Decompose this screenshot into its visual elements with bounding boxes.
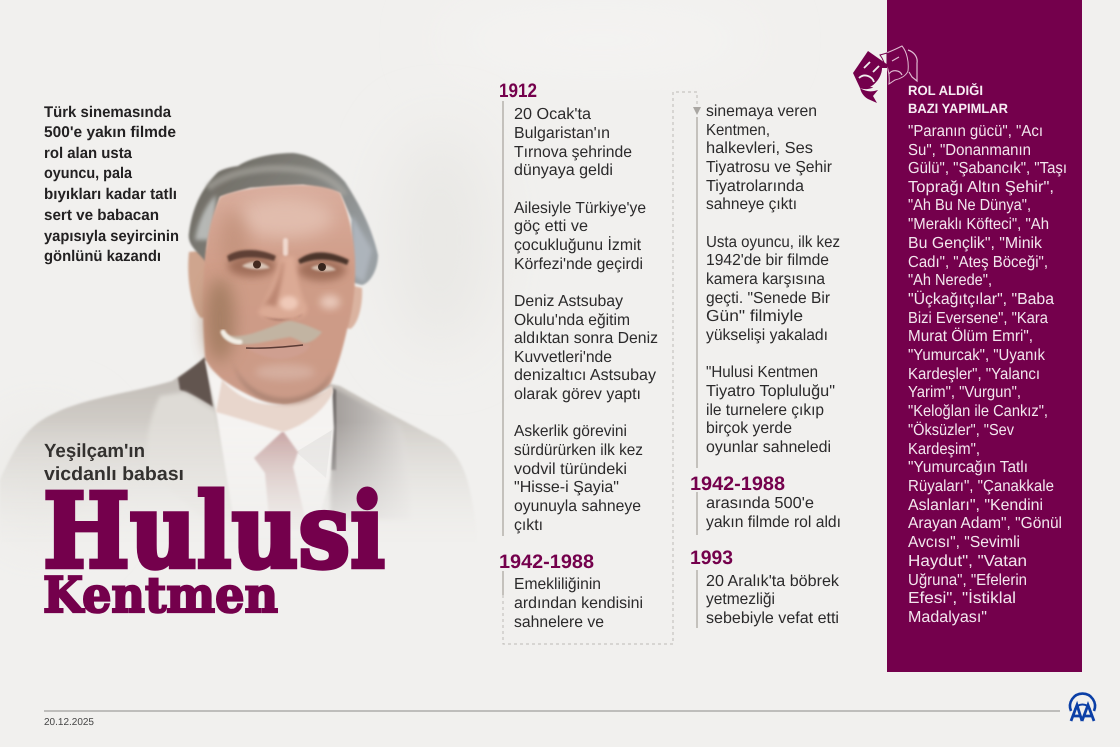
timeline column 1: "Hisse-i Şayia"	[514, 479, 619, 496]
timeline column 1: Tırnova şehrinde	[514, 144, 632, 161]
timeline column 1: Okulu'nda eğitim	[514, 312, 630, 329]
film list: Efesi", "İstiklal	[908, 589, 1016, 607]
timeline column 2: 20 Aralık'ta böbrek	[706, 573, 840, 590]
film list: Murat Ölüm Emri",	[908, 327, 1033, 345]
timeline column 1: sürdürürken ilk kez	[514, 442, 643, 459]
timeline column 1: denizaltıcı Astsubay	[514, 367, 656, 384]
timeline column 1: 1912	[499, 80, 537, 102]
date: 20.12.2025	[44, 717, 94, 728]
lips	[247, 345, 310, 359]
film list: Kardeşim",	[908, 441, 980, 458]
subtitle: Yeşilçam'ın	[44, 441, 145, 462]
subtitle	[44, 441, 184, 485]
timeline column 1: çocukluğunu İzmit	[514, 236, 642, 254]
intro text	[44, 104, 179, 265]
timeline column 1: Ailesiyle Türkiye'ye	[514, 200, 646, 217]
timeline column 1: aldıktan sonra Deniz	[514, 330, 658, 347]
timeline column 2: Tiyatro Topluluğu"	[706, 383, 835, 400]
timeline column 2: "Hulusi Kentmen	[706, 364, 818, 381]
face	[203, 185, 355, 404]
timeline column 2: 1942'de bir filmde	[706, 252, 829, 269]
intro text: rol alan usta	[44, 145, 132, 162]
icon: AA logo	[1070, 694, 1095, 721]
film list: "Ah Bu Ne Dünya",	[908, 197, 1031, 214]
timeline column 2: yetmezliği	[706, 591, 775, 608]
timeline column 2: Usta oyuncu, ilk kez	[706, 234, 840, 251]
timeline column 1: Kuvvetleri'nde	[514, 349, 612, 366]
timeline column 2: Tiyatrolarında	[706, 178, 804, 195]
film list: "Keloğlan ile Cankız",	[908, 403, 1048, 420]
timeline column 1: Askerlik görevini	[514, 423, 627, 440]
timeline column 2: geçti. "Senede Bir	[706, 290, 831, 307]
film list: Su", "Donanmanın	[908, 142, 1031, 159]
hair	[189, 153, 378, 285]
timeline column 2: sinemaya veren	[706, 103, 817, 120]
timeline column 1: çıktı	[514, 517, 543, 534]
film list: Bizi Eversene", "Kara	[908, 310, 1048, 327]
film list: Avcısı", "Sevimli	[908, 534, 1020, 551]
eye sockets	[228, 255, 276, 277]
timeline column 2: yükselişi yakaladı	[706, 327, 828, 344]
nose	[258, 256, 307, 319]
moustache	[222, 321, 322, 344]
intro text: gönlünü kazandı	[44, 248, 161, 265]
timeline column 2: sahneye çıktı	[706, 196, 797, 213]
intro text: sert ve babacan	[44, 207, 159, 224]
film list: Kardeşler", "Yalancı	[908, 366, 1040, 383]
film list: Aslanları", "Kendini	[908, 497, 1043, 514]
intro text: yapısıyla seyircinin	[44, 228, 179, 245]
timeline column 2	[690, 103, 841, 627]
timeline column 1: 1942-1988	[499, 551, 594, 573]
timeline column 2: ile turnelere çıkıp	[706, 402, 824, 419]
intro text: Türk sinemasında	[44, 104, 171, 121]
name title: Kentmen	[43, 566, 278, 624]
timeline connector lines	[503, 92, 701, 644]
timeline column 1: dünyaya geldi	[514, 162, 613, 179]
film list: Yarim", "Vurgun",	[908, 384, 1021, 401]
film list: "Meraklı Köfteci", "Ah	[908, 216, 1049, 233]
film list: Madalyası"	[908, 609, 987, 626]
timeline column 1	[499, 80, 658, 631]
panel heading: ROL ALDIĞI	[908, 83, 983, 98]
intro text: bıyıkları kadar tatlı	[44, 186, 177, 203]
timeline column 1: Emekliliğinin	[514, 576, 601, 593]
timeline column 2: Gün" filmiyle	[706, 308, 803, 325]
neck	[216, 380, 333, 432]
intro text: 500'e yakın filmde	[44, 124, 176, 141]
eyebrows	[227, 250, 276, 262]
film list: Uğruna", "Efelerin	[908, 572, 1027, 589]
film list: "Yumurcağın Tatlı	[908, 459, 1028, 476]
timeline column 2: kamera karşısına	[706, 271, 825, 288]
timeline column 2: arasında 500'e	[706, 495, 814, 512]
film list	[908, 123, 1067, 626]
suit, shirt and tie	[1, 356, 468, 520]
ears	[188, 250, 214, 318]
timeline column 2: 1993	[690, 547, 733, 569]
intro text: oyuncu, pala	[44, 165, 132, 182]
timeline column 2: sebebiyle vefat etti	[706, 610, 839, 627]
footer rule	[44, 710, 1060, 712]
film list: "Öksüzler", "Sev	[908, 421, 1014, 439]
eyes	[242, 262, 270, 269]
timeline column 2: Kentmen,	[706, 122, 770, 139]
timeline column 1: Deniz Astsubay	[514, 293, 623, 310]
panel heading	[908, 83, 1008, 116]
film list: Haydut", "Vatan	[908, 553, 1027, 570]
subtitle: vicdanlı babası	[44, 464, 184, 485]
film list: Bu Gençlik", "Minik	[908, 235, 1043, 252]
panel: films	[887, 0, 1082, 672]
film list: Cadı", "Ateş Böceği",	[908, 254, 1048, 271]
icon: theatre masks	[853, 46, 917, 103]
film list: "Paranın gücü", "Acı	[908, 123, 1043, 140]
portrait of Hulusi Kentmen	[0, 153, 478, 560]
film list: "Ah Nerede",	[908, 272, 992, 289]
timeline column 1: olarak görev yaptı	[514, 386, 641, 403]
film list: Rüyaları", "Çanakkale	[908, 478, 1054, 495]
film list: "Yumurcak", "Uyanık	[908, 347, 1046, 364]
timeline column 2: halkevleri, Ses	[706, 140, 813, 157]
film list: Gülü", "Şabancık", "Taşı	[908, 160, 1067, 177]
timeline column 1: oyunuyla sahneye	[514, 498, 641, 515]
film list: "Üçkağıtçılar", "Baba	[908, 290, 1054, 308]
timeline column 1: Bulgaristan'ın	[514, 125, 610, 142]
timeline column 2: birçok yerde	[706, 420, 792, 437]
film list: Toprağı Altın Şehir",	[908, 179, 1054, 196]
timeline column 1: vodvil türündeki	[514, 461, 627, 478]
film list: Arayan Adam", "Gönül	[908, 515, 1062, 532]
timeline column 2: 1942-1988	[690, 473, 785, 495]
timeline column 1: sahnelere ve	[514, 614, 604, 631]
name title: Hulusi	[43, 471, 385, 592]
timeline column 2: Tiyatrosu ve Şehir	[706, 159, 833, 176]
panel heading: BAZI YAPIMLAR	[908, 101, 1008, 116]
timeline column 2: oyunlar sahneledi	[706, 439, 831, 456]
timeline column 1: ardından kendisini	[514, 595, 643, 612]
timeline column 1: göç etti ve	[514, 218, 588, 235]
timeline column 1: 20 Ocak'ta	[514, 106, 591, 123]
timeline column 1: Körfezi'nde geçirdi	[514, 256, 643, 273]
timeline column 2: yakın filmde rol aldı	[706, 514, 841, 531]
